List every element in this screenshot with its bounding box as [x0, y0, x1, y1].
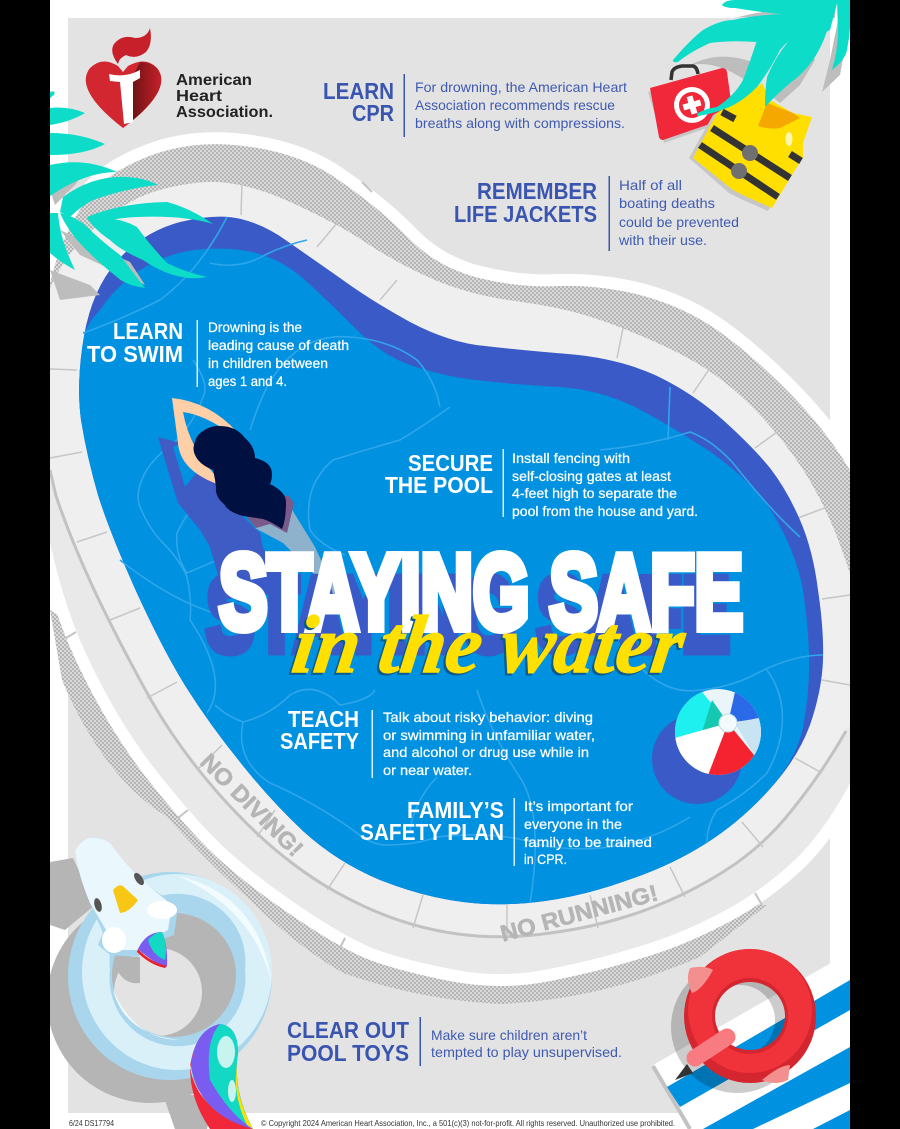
flamingo wings — [688, 967, 713, 993]
subtitle shadow: in the water — [285, 601, 689, 692]
heading: LEARN — [113, 318, 183, 344]
body text: or swimming in unfamiliar water, — [383, 727, 595, 743]
body text — [415, 79, 627, 131]
heading: CLEAR OUT — [287, 1017, 409, 1043]
pool deck and surround — [29, 138, 892, 1004]
body text: Association recommends rescue — [415, 97, 615, 113]
organization name: American — [176, 72, 252, 89]
heading: SAFETY PLAN — [360, 819, 504, 845]
subtitle: in the water — [287, 599, 691, 690]
title — [206, 534, 743, 692]
pool tile border — [34, 182, 866, 940]
body text — [431, 1027, 622, 1060]
body text: 4-feet high to separate the — [512, 485, 677, 501]
body text: in CPR. — [524, 851, 567, 867]
swimmer arms — [172, 398, 237, 484]
float ring — [684, 949, 816, 1083]
beach towel — [653, 952, 850, 1129]
icon: life jacket — [689, 83, 812, 211]
body text: and alcohol or drug use while in — [383, 744, 589, 760]
heading: FAMILY’S — [407, 797, 504, 823]
body text: could be prevented — [619, 214, 739, 230]
section: remember life jackets — [454, 176, 739, 251]
body text: with their use. — [618, 232, 707, 248]
palm leaves: top right — [673, 0, 851, 116]
section: secure the pool — [385, 449, 698, 519]
footer: copyright: © Copyright 2024 American Heart Association, Inc., a 501(c)(3) not-for-profit. All rights reserved. Unauthorized use prohibited. — [261, 1119, 675, 1128]
icon: flame — [112, 28, 151, 64]
body text — [618, 177, 739, 248]
body text: breaths along with compressions. — [415, 115, 625, 131]
heading: POOL TOYS — [287, 1040, 409, 1066]
float shadow — [47, 858, 253, 1129]
body text: everyone in the — [524, 816, 622, 832]
palm leaves: left — [50, 91, 213, 288]
swimmer — [158, 398, 359, 612]
heading: SECURE — [408, 450, 493, 476]
body text: For drowning, the American Heart — [415, 79, 627, 95]
body text: or near water. — [383, 762, 472, 778]
body text — [524, 798, 652, 867]
float shadow — [671, 961, 803, 1093]
palm shadow: left — [50, 165, 145, 300]
heading — [323, 78, 394, 126]
swimmer shadow — [158, 437, 290, 600]
swan pool float — [47, 838, 272, 1129]
body text: It’s important for — [524, 798, 633, 814]
heading: REMEMBER — [477, 178, 597, 204]
body text: boating deaths — [619, 195, 715, 211]
label: no running: NO RUNNING! — [497, 879, 661, 947]
label: no diving: NO DIVING! — [195, 748, 309, 862]
icon: beach ball — [652, 689, 761, 804]
body text: Drowning is the — [208, 319, 302, 335]
body text: Make sure children aren’t — [431, 1027, 587, 1043]
swan head — [75, 838, 178, 957]
logo: American Heart Association — [86, 28, 273, 128]
body text: Talk about risky behavior: diving — [383, 709, 593, 725]
heading — [360, 797, 504, 845]
body text: tempted to play unsupervised. — [431, 1044, 622, 1060]
heading — [287, 1017, 409, 1066]
swimmer legs — [255, 503, 359, 612]
body text — [383, 709, 595, 778]
flamingo pool float — [671, 949, 816, 1093]
heading: LIFE JACKETS — [454, 201, 597, 227]
body text: Install fencing with — [512, 450, 630, 466]
body text: self-closing gates at least — [512, 468, 671, 484]
organization name: Heart — [176, 88, 222, 105]
pool water — [79, 217, 823, 904]
body text: Half of all — [619, 177, 682, 193]
heading: CPR — [352, 100, 394, 126]
flamingo beak — [675, 1064, 693, 1080]
organization name — [176, 72, 273, 121]
heading: TEACH — [288, 706, 359, 732]
swan beak — [113, 885, 138, 913]
palm shadow: top right — [690, 0, 848, 103]
swan eyes — [93, 897, 103, 913]
footer: document number: 6/24 DS17794 — [69, 1119, 114, 1128]
icon: torch — [109, 70, 140, 124]
heading: THE POOL — [385, 472, 493, 498]
body text: in children between — [208, 355, 328, 371]
heading: TO SWIM — [87, 341, 183, 367]
section: family's safety plan — [360, 797, 652, 867]
section: learn cpr — [323, 74, 627, 137]
heading: LEARN — [323, 78, 394, 104]
body text: family to be trained — [524, 834, 652, 850]
icon: first aid kit — [648, 66, 735, 143]
rainbow mouth — [138, 932, 167, 966]
section: clear out pool toys — [287, 1017, 622, 1066]
swimmer swimsuit — [243, 495, 294, 533]
float ring — [68, 872, 272, 1080]
section: learn to swim — [87, 318, 349, 389]
body text: leading cause of death — [208, 337, 349, 353]
body text — [512, 450, 698, 519]
section: teach safety — [280, 706, 595, 778]
body text: pool from the house and yard. — [512, 503, 698, 519]
organization name: Association. — [176, 104, 273, 121]
swimmer hair — [194, 426, 286, 529]
icon: heart — [86, 61, 161, 128]
heading — [280, 706, 359, 754]
heading: SAFETY — [280, 728, 359, 754]
body text — [208, 319, 349, 389]
heading — [385, 450, 493, 498]
heading — [454, 178, 597, 227]
heading — [87, 318, 183, 367]
rainbow tail — [190, 1024, 253, 1129]
flamingo neck — [695, 1037, 727, 1058]
body text: ages 1 and 4. — [208, 373, 287, 389]
